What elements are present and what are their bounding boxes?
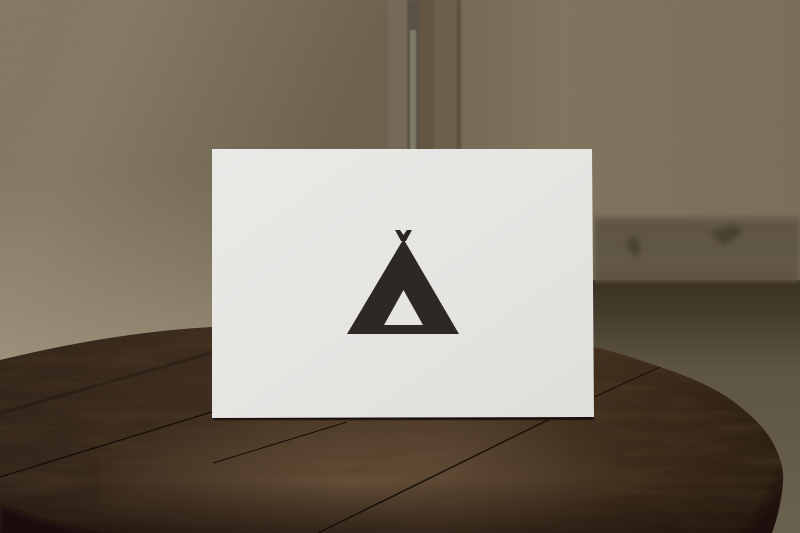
teepee icon (347, 230, 459, 334)
wall: right burlap panel (400, 0, 800, 230)
teepee body (347, 239, 459, 334)
plank seams (0, 353, 660, 533)
card (212, 149, 594, 418)
stool edge shadow (0, 505, 100, 533)
wooden rail (594, 216, 800, 282)
teepee poles (395, 230, 412, 241)
wooden post (388, 0, 461, 150)
wall: lower right shadowed section (590, 280, 800, 533)
stool top (0, 320, 800, 533)
wall texture (0, 0, 800, 225)
wall: left burlap panel (0, 0, 400, 380)
card shadow (214, 416, 594, 420)
